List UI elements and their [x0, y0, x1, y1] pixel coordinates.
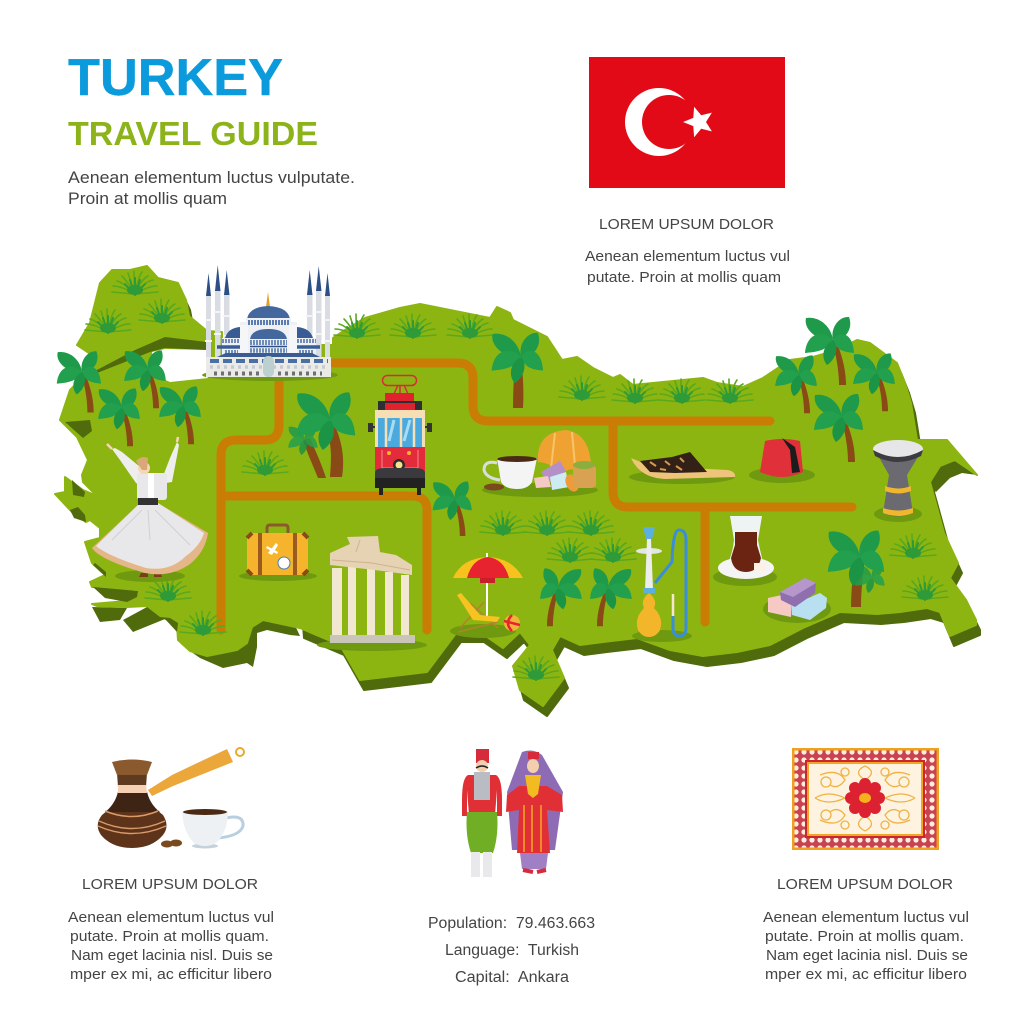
panel: coffee [68, 748, 274, 983]
icon: hookah [632, 527, 692, 642]
icon: tea glass on saucer [713, 516, 777, 586]
icon: Turkish carpet [792, 748, 939, 850]
text block: coffee: putate. Proin at mollis quam. [70, 928, 269, 945]
road network [221, 363, 852, 630]
flag caption [585, 217, 790, 286]
text block: carpet: mper ex mi, ac efficitur libero [765, 966, 967, 983]
icon: pide flatbread plate [629, 452, 735, 484]
flag caption: LOREM UPSUM DOLOR [599, 217, 774, 233]
text block: carpet: LOREM UPSUM DOLOR [777, 877, 953, 893]
panel: carpet [763, 748, 969, 983]
icon: cezve and cup [98, 748, 244, 848]
text block: coffee: Nam eget lacinia nisl. Duis se [71, 947, 273, 964]
facts text: Capital: Ankara [455, 969, 569, 986]
subtitle: Travel Guide: TRAVEL GUIDE [68, 115, 318, 152]
text block: carpet: Nam eget lacinia nisl. Duis se [766, 947, 968, 964]
icon: Blue Mosque [202, 265, 338, 381]
icon: whirling dervish [92, 437, 208, 582]
icon: fez hat [749, 438, 815, 483]
icon: couple in traditional costume [462, 749, 563, 877]
title: Turkey: TURKEY [68, 49, 283, 107]
map of Turkey [55, 266, 980, 716]
flag caption: putate. Proin at mollis quam [587, 269, 781, 286]
panel: national facts [428, 749, 595, 986]
icon: suitcase [239, 525, 317, 581]
flag of Turkey [589, 57, 785, 188]
text block: coffee [68, 877, 274, 983]
icon: coffee and pastries [482, 430, 598, 497]
icon: Turkish delight [763, 578, 831, 623]
intro text [68, 168, 355, 208]
text block: carpet: Aenean elementum luctus vul [763, 909, 969, 926]
icon: darbuka drum [873, 440, 923, 522]
facts text: Language: Turkish [445, 942, 579, 959]
facts text [428, 915, 595, 986]
text block: coffee: LOREM UPSUM DOLOR [82, 877, 258, 893]
text block: coffee: mper ex mi, ac efficitur libero [70, 966, 272, 983]
icon: ancient ruins [317, 536, 427, 651]
intro text: Aenean elementum luctus vulputate. [68, 168, 355, 187]
facts text: Population: 79.463.663 [428, 915, 595, 932]
text block: carpet [763, 877, 969, 983]
flag caption: Aenean elementum luctus vul [585, 248, 790, 265]
intro text: Proin at mollis quam [68, 189, 227, 208]
text block: carpet: putate. Proin at mollis quam. [765, 928, 964, 945]
palm trees [57, 317, 895, 626]
bushes [85, 271, 948, 680]
text block: coffee: Aenean elementum luctus vul [68, 909, 274, 926]
icon: red tram [368, 376, 432, 495]
icon: beach umbrella and deck chair [450, 553, 523, 638]
